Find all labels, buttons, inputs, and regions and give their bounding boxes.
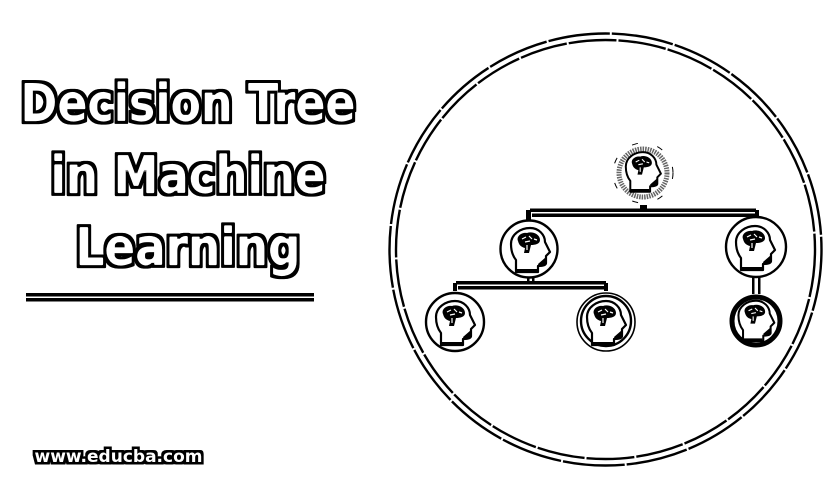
tree connectors bbox=[453, 205, 760, 294]
website footer: www.educba.com bbox=[34, 447, 202, 467]
node: level 3 left bbox=[426, 293, 484, 351]
title: in Machine bbox=[50, 146, 326, 206]
node: level 3 right bbox=[732, 297, 780, 345]
title bbox=[20, 74, 356, 278]
title: Decision Tree bbox=[20, 74, 356, 134]
node: level 2 left bbox=[500, 220, 558, 278]
title underline bbox=[26, 293, 314, 302]
outer double ring bbox=[390, 34, 822, 466]
node: level 2 right bbox=[726, 217, 786, 277]
node: level 3 middle bbox=[577, 293, 635, 351]
root node bbox=[613, 143, 673, 203]
title: Learning bbox=[76, 218, 300, 278]
